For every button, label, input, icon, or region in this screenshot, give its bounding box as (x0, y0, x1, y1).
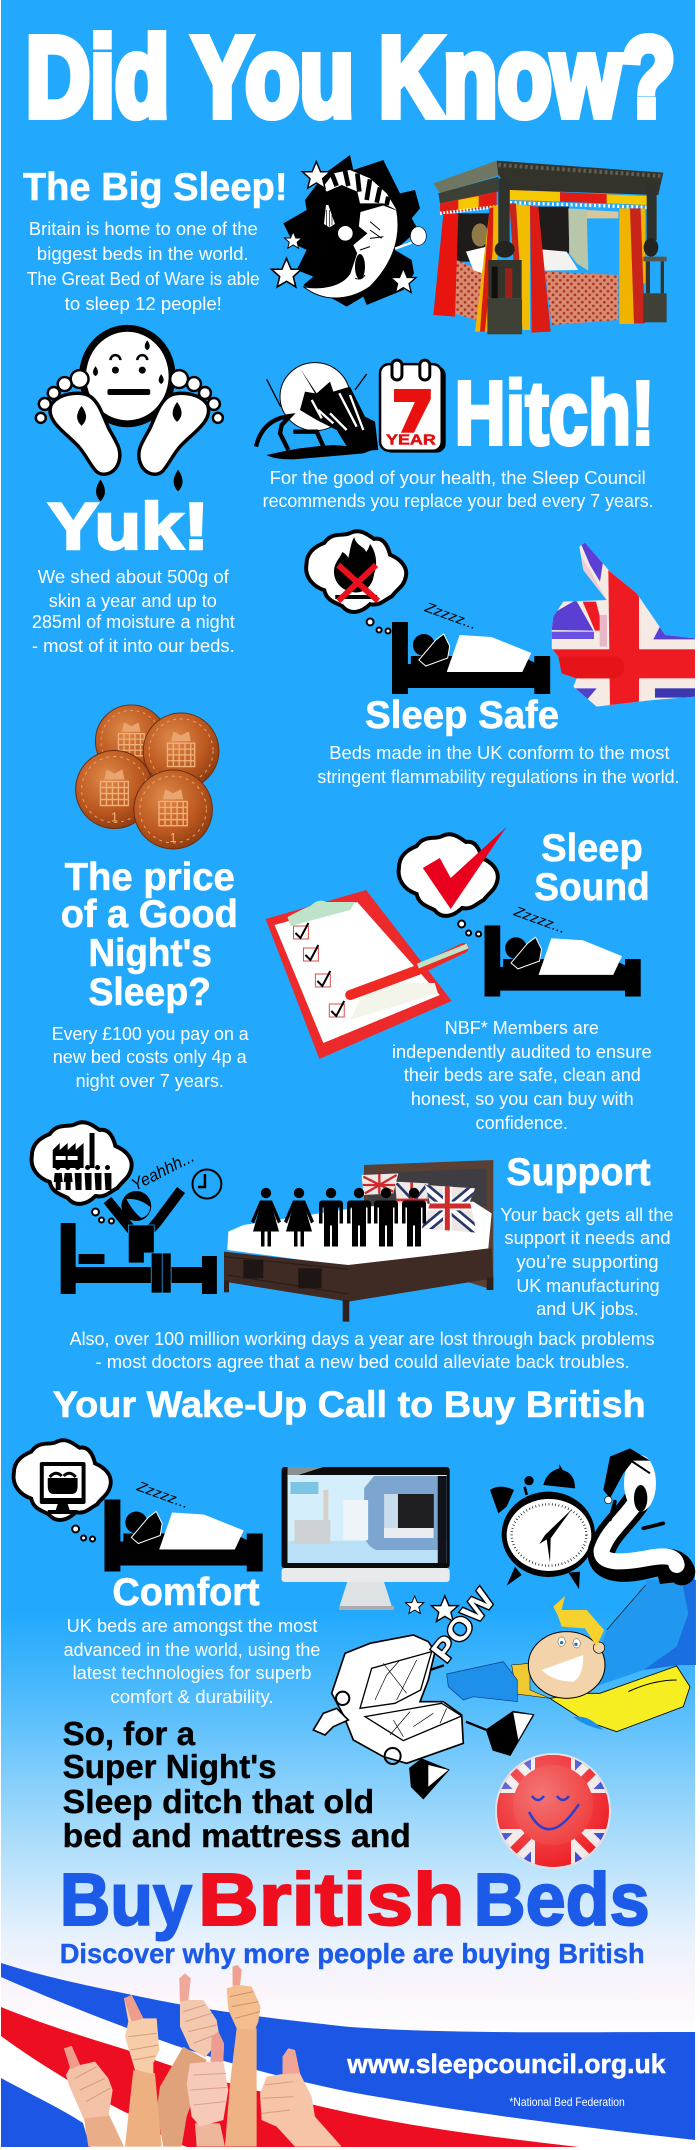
logo: buy british beds (60, 1858, 650, 1941)
text block: sleep safe: stringent flammability regulations in the world. (317, 766, 680, 787)
icon: thought bubble with crossed out flame (306, 531, 406, 612)
text: yeahhh: Yeahhh... (128, 1147, 197, 1195)
text: zzzzz: Zzzzz... (134, 1477, 191, 1511)
text block: sleep sound: confidence. (476, 1112, 568, 1133)
text block: call to action: Super Night's (63, 1748, 277, 1785)
text block: sleep sound: honest, so you can buy with (411, 1088, 634, 1109)
panel: 7 year hitch (256, 360, 655, 511)
hand 3 with arm (157, 1973, 220, 2147)
heading: sleep safe: Sleep Safe (365, 694, 559, 737)
bubble dots (367, 618, 390, 634)
heading: comfort: Comfort (112, 1571, 260, 1614)
text block: sleep sound: their beds are safe, clean and (404, 1064, 641, 1085)
face (528, 1596, 605, 1698)
icon: face between two feet (36, 328, 223, 501)
glove (447, 1662, 517, 1702)
yellow suit (550, 1666, 690, 1732)
heading: sleep sound (534, 827, 650, 909)
text block: support: UK manufacturing (516, 1275, 660, 1296)
text block: sleep safe: Beds made in the UK conform to the most (329, 742, 670, 763)
text block: big sleep: to sleep 12 people! (65, 293, 222, 314)
panel: support (32, 1122, 674, 1372)
logo: buy british beds: Buy (60, 1858, 192, 1941)
text block: call to action: So, for a (63, 1715, 196, 1752)
text block: call to action: Sleep ditch that old (63, 1783, 374, 1820)
panel: comfort (14, 1440, 450, 1707)
photo: great bed of ware (433, 161, 667, 334)
bubble dots (458, 920, 481, 936)
heading: the price: Night's (89, 932, 212, 975)
heading: the price: of a Good (61, 893, 238, 936)
icon: 7 year calendar: YEAR (386, 432, 436, 449)
icon: row of six workers (251, 1188, 426, 1246)
tagline: Discover why more people are buying British (60, 1938, 645, 1969)
text block: yuk: We shed about 500g of (38, 566, 230, 587)
hand 1 with arm (64, 2046, 124, 2147)
panel: price of a good night's sleep (52, 705, 249, 1091)
text block: yuk: skin a year and up to (49, 590, 217, 611)
text block: yuk: 285ml of moisture a night (32, 611, 235, 632)
heading: support: Support (506, 1151, 651, 1194)
text: pow: POW (425, 1583, 502, 1668)
text block: big sleep: biggest beds in the world. (37, 243, 249, 264)
heading: the price (61, 856, 238, 1014)
hand 5 with arm (187, 2032, 228, 2147)
text: footnote: *National Bed Federation (509, 2097, 625, 2109)
icon: smiling union jack badge (495, 1753, 611, 1869)
text block: back problems: Also, over 100 million working days a year are lost through back problems (70, 1328, 655, 1349)
text block: call to action (63, 1715, 411, 1854)
heading: sleep sound: Sound (534, 866, 650, 909)
stars (405, 1596, 458, 1621)
bubble dots (72, 1526, 95, 1542)
text block: back problems: - most doctors agree that a new bed could alleviate back troubles. (96, 1351, 630, 1372)
icon: battered mattress (313, 1635, 533, 1798)
text block: price: Every £100 you pay on a (52, 1023, 249, 1044)
text block: big sleep (27, 218, 260, 314)
text block: hitch: For the good of your health, the Sleep Council (270, 467, 646, 488)
text block: sleep safe (317, 742, 680, 787)
text block: support: support it needs and (504, 1227, 671, 1248)
text block: big sleep: Britain is home to one of the (29, 218, 258, 239)
icon: clock (193, 1170, 221, 1198)
text block: hitch: recommends you replace your bed every 7 years. (263, 490, 654, 511)
text block: sleep sound (392, 1017, 652, 1133)
text block: price: new bed costs only 4p a (53, 1046, 247, 1067)
text block: sleep sound: independently audited to ensure (392, 1041, 652, 1062)
photo: four pennies (76, 705, 219, 849)
panel: sleep sound (266, 827, 652, 1133)
photo: modern bed with union jack pillows (224, 1160, 493, 1322)
icon: sleepy worm in nightcap (601, 1448, 695, 1584)
cape (585, 1580, 696, 1690)
text block: yuk (32, 566, 235, 656)
icon: dust mite (256, 363, 378, 459)
text block: support (500, 1204, 674, 1319)
text: website: www.sleepcouncil.org.uk (346, 2049, 666, 2079)
heading: the price: The price (65, 856, 235, 899)
photo: union jack thumbs up (550, 540, 697, 710)
panel: the big sleep (23, 155, 667, 334)
text block: call to action: bed and mattress and (63, 1817, 411, 1854)
heading: the price: Sleep? (89, 971, 211, 1014)
text block: back problems (70, 1328, 655, 1372)
text block: comfort: latest technologies for superb (73, 1662, 311, 1683)
panel: yuk (32, 328, 235, 656)
text block: big sleep: The Great Bed of Ware is able (27, 268, 260, 289)
footer swoosh: flag stripes (1, 1963, 695, 2147)
icon: alarm clock (490, 1464, 595, 1589)
photo: monitor showing bed pod (282, 1467, 450, 1610)
heading: wake-up call: Your Wake-Up Call to Buy British (53, 1384, 646, 1425)
logo: buy british beds: Beds (474, 1858, 650, 1941)
illustration: superhero punching mattress (313, 1580, 696, 1798)
panel: sleep safe (306, 531, 697, 787)
icon: person asleep in bed (485, 925, 641, 997)
text: zzzzz: Zzzzz... (422, 598, 479, 632)
text block: sleep sound: NBF* Members are (445, 1017, 599, 1038)
text block: comfort: UK beds are amongst the most (67, 1615, 317, 1636)
icon: person asleep in bed (392, 622, 550, 694)
photo: raised thumbs up hands (64, 1965, 342, 2147)
hand 2 with arm (124, 1995, 162, 2147)
icon: person asleep in bed (104, 1500, 263, 1572)
icon: thought bubble with monitor (14, 1440, 111, 1520)
heading: yuk: Yuk! (48, 489, 209, 563)
text block: support: Your back gets all the (500, 1204, 674, 1225)
icon: person waking and sitting up (61, 1190, 217, 1294)
text block: yuk: - most of it into our beds. (32, 635, 235, 656)
hand 4 with arm (225, 1965, 261, 2147)
text block: comfort: comfort & durability. (110, 1686, 274, 1707)
hand 6 with arm (260, 2048, 342, 2147)
text block: hitch (263, 467, 654, 511)
text: zzzzz: Zzzzz... (511, 902, 568, 936)
text block: price (52, 1023, 249, 1091)
icon: clipboard and pen (266, 890, 468, 1059)
logo: buy british beds: British (198, 1858, 465, 1941)
text block: price: night over 7 years. (76, 1070, 224, 1091)
text block: comfort (64, 1615, 320, 1707)
heading: the big sleep: The Big Sleep! (23, 166, 288, 209)
icon: yawning moon (271, 155, 426, 307)
text block: comfort: advanced in the world, using the (64, 1639, 320, 1660)
text block: support: you’re supporting (516, 1251, 659, 1272)
heading: sleep sound: Sleep (541, 827, 643, 870)
icon: thought bubble with tick (399, 827, 506, 916)
icon: 7 year calendar (380, 360, 446, 453)
bubble dots (92, 1208, 114, 1224)
icon: thought bubble with factory and workers (32, 1122, 132, 1204)
text block: support: and UK jobs. (536, 1298, 639, 1319)
